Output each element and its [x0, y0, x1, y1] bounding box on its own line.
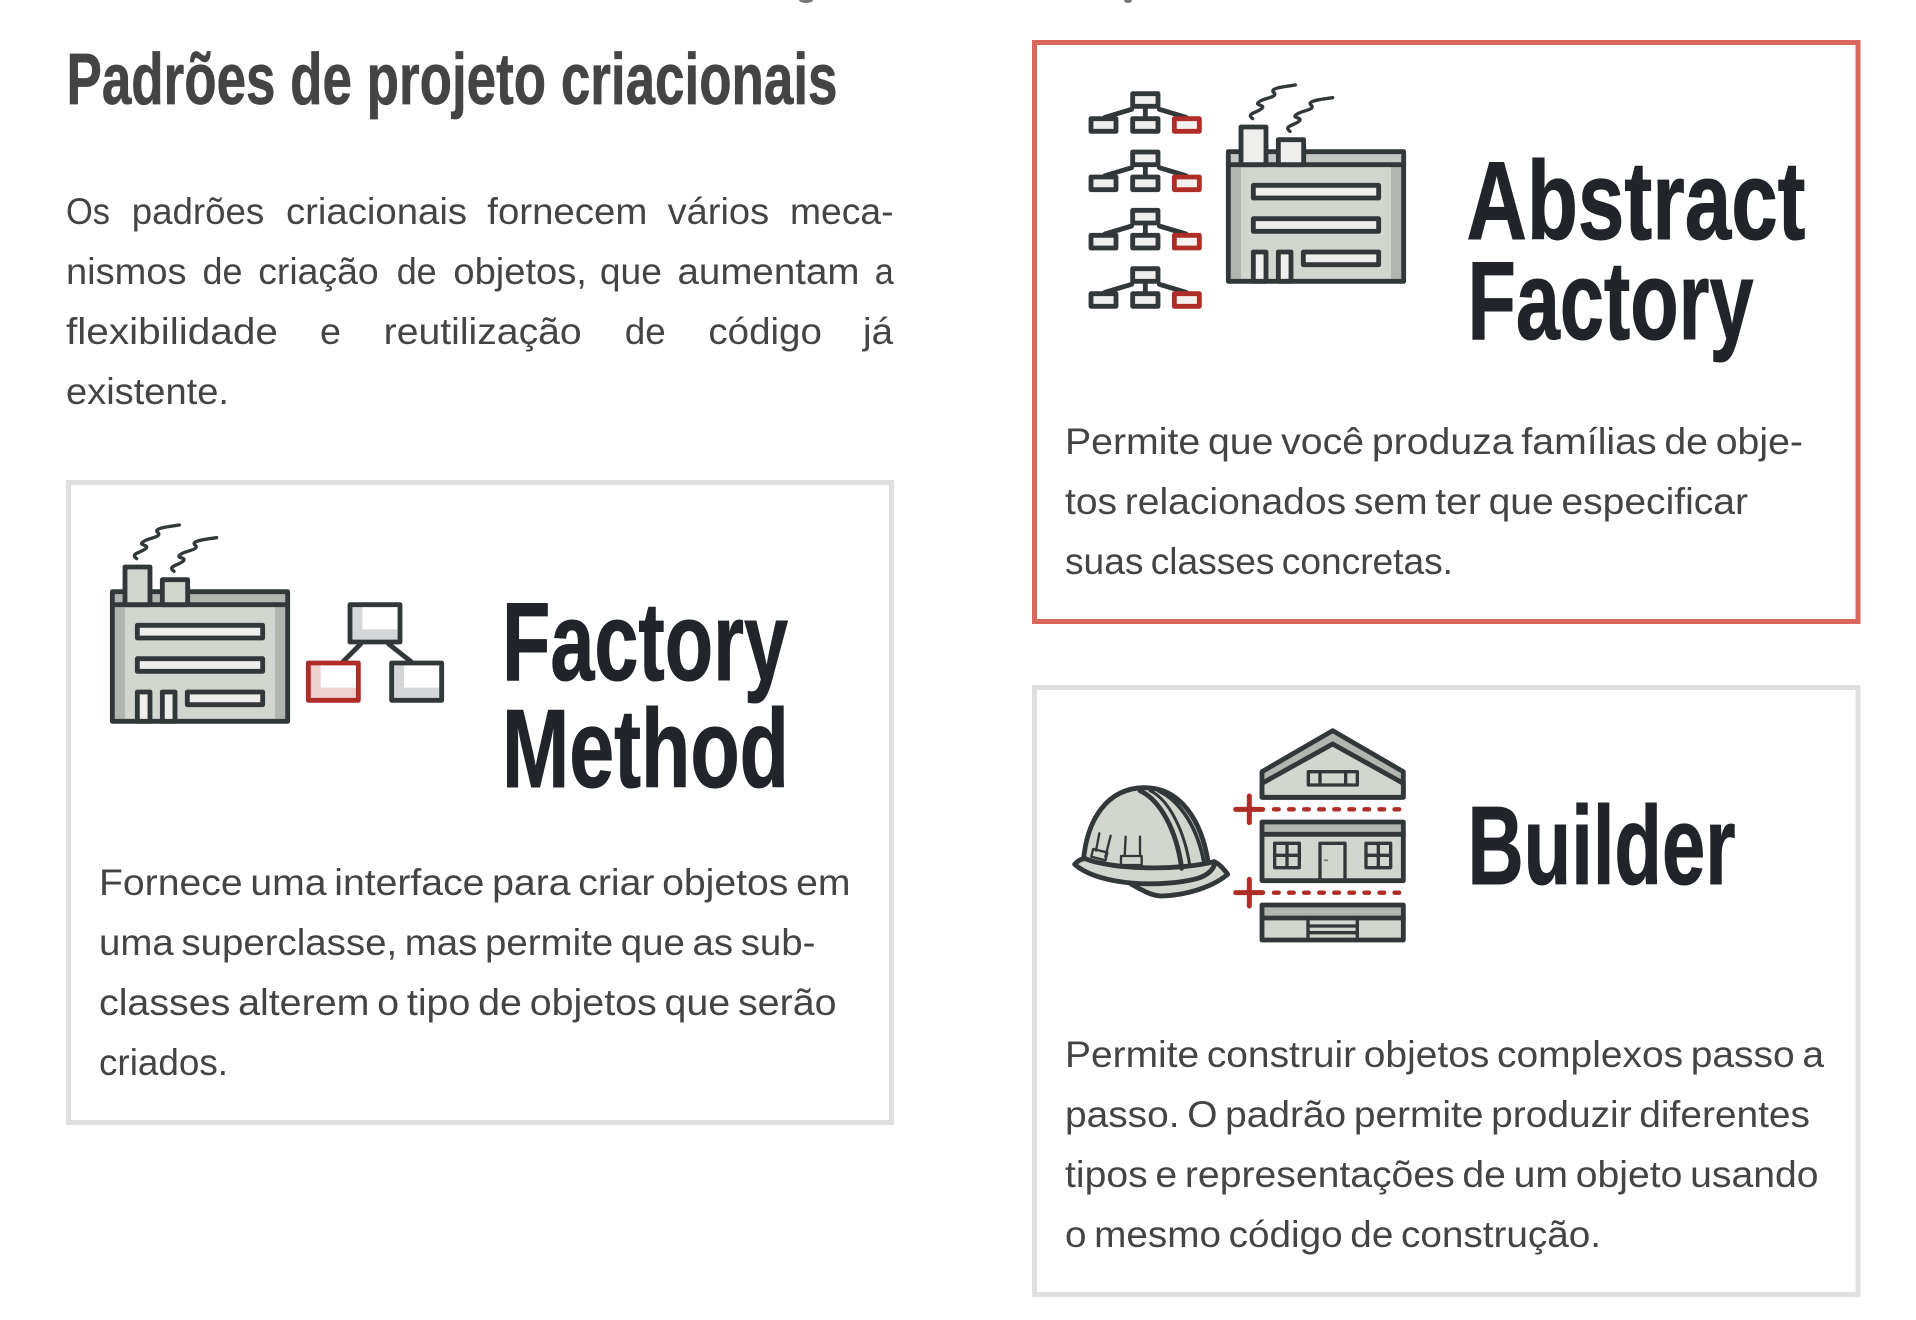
icon: house split into build steps [1236, 731, 1403, 940]
intro text block: nismos [66, 250, 186, 292]
title: Abstract Factory: Factory [1468, 239, 1754, 363]
icon: red plus and dashed seams [1236, 796, 1402, 906]
title: Factory Method [502, 580, 789, 811]
description: Factory Method: Fornece uma interface para criar objetos em [99, 861, 850, 903]
panel: Builder [1034, 688, 1858, 1294]
description: Factory Method: uma superclasse, mas permite que as sub- [99, 921, 816, 963]
description: Abstract Factory: suas classes concretas. [1065, 540, 1453, 582]
description: Factory Method: criados. [99, 1041, 228, 1083]
intro text block: flexibilidade [66, 310, 278, 352]
intro text block: criacionais [286, 190, 467, 232]
intro text block: reutilização [384, 310, 582, 352]
title: Factory Method: Method [502, 687, 789, 811]
description: Builder: tipos e representações de um objeto usando [1065, 1153, 1818, 1195]
description: Builder: Permite construir objetos complexos passo a [1065, 1033, 1824, 1075]
intro text block: de [625, 310, 666, 352]
icon: four object families [1091, 94, 1199, 306]
heading: Padrões de projeto criacionais: Padrões de projeto criacionais [66, 40, 838, 120]
intro text block [66, 190, 894, 412]
intro text block: existente. [66, 370, 229, 412]
icon: factory [112, 525, 288, 721]
intro text block: de [202, 250, 242, 292]
icon: factory [1228, 85, 1404, 281]
intro text block: a [875, 250, 894, 292]
intro text block: aumentam [678, 250, 860, 292]
intro text block: que [600, 250, 662, 292]
intro text block: de [397, 250, 437, 292]
panel: Factory Method [68, 482, 892, 1122]
description: Abstract Factory [1065, 420, 1803, 582]
description: Builder: passo. O padrão permite produzir diferentes [1065, 1093, 1810, 1135]
title: Builder: Builder [1468, 784, 1736, 908]
intro text block: já [862, 310, 893, 352]
intro text block: código [708, 310, 822, 352]
description: Builder [1065, 1033, 1824, 1255]
intro text block: criação [258, 250, 379, 292]
intro text block: objetos, [453, 250, 587, 292]
icon: class hierarchy tree [308, 605, 442, 700]
icon: hard hat [1075, 788, 1228, 896]
title: Abstract Factory [1466, 139, 1806, 363]
intro text block: e [320, 310, 341, 352]
intro text block: meca- [790, 190, 894, 232]
description: Factory Method [99, 861, 850, 1083]
description: Builder: o mesmo código de construção. [1065, 1213, 1601, 1255]
title: Abstract Factory: Abstract [1466, 139, 1806, 263]
intro text block: fornecem [487, 190, 647, 232]
intro text block: Os [66, 190, 110, 232]
intro text block: padrões [132, 190, 264, 232]
title: Factory Method: Factory [502, 580, 788, 704]
description: Factory Method: classes alterem o tipo de objetos que serão [99, 981, 836, 1023]
intro text block: vários [668, 190, 769, 232]
panel: Abstract Factory [1034, 42, 1858, 622]
description: Abstract Factory: tos relacionados sem ter que especificar [1065, 480, 1748, 522]
description: Abstract Factory: Permite que você produza famílias de obje- [1065, 420, 1803, 462]
